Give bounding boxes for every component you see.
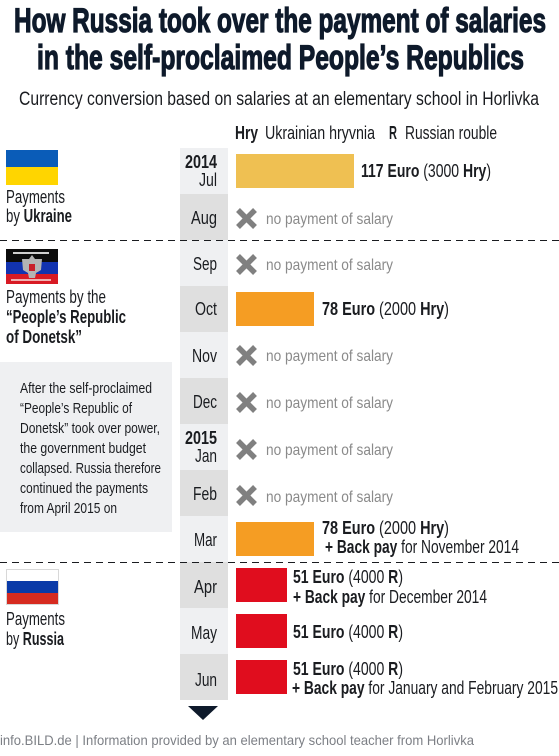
- month column: Aug: [191, 208, 217, 228]
- bar: Oct 2014: [236, 292, 449, 326]
- bar: Jul 2014: [236, 154, 491, 188]
- bar: May 2015: [236, 614, 403, 648]
- no payment: Aug: [238, 210, 393, 228]
- callout: After the self-proclaimed: [20, 380, 152, 397]
- no payment: Nov: [238, 347, 393, 365]
- no payment: Sep: no payment of salary: [266, 257, 393, 274]
- month column: Feb: [193, 484, 217, 504]
- currency legend: R: [389, 123, 397, 143]
- dividers: [0, 240, 559, 242]
- currency legend: Russian rouble: [405, 123, 497, 143]
- month column: Jul: [199, 170, 217, 190]
- label: Payments by the People's Republic of Donetsk: Payments by the: [6, 287, 106, 307]
- month column: Jun: [195, 670, 217, 690]
- month column: May: [191, 623, 217, 643]
- bar: Oct 2014: 78 Euro (2000 Hry): [322, 299, 449, 319]
- label: Payments by the People's Republic of Donetsk: [6, 287, 126, 347]
- label: Payments by Ukraine: by Ukraine: [6, 206, 72, 226]
- title: [14, 2, 546, 77]
- label: Payments by Ukraine: Payments: [6, 187, 65, 207]
- no payment: Jan: [238, 441, 393, 459]
- label: Payments by Russia: by Russia: [6, 629, 65, 649]
- bar: Jul 2014: 117 Euro (3000 Hry): [361, 161, 491, 181]
- no payment: Dec: no payment of salary: [266, 395, 393, 412]
- month column: 2014: [185, 152, 217, 172]
- month column: Mar: [194, 530, 217, 550]
- bar: May 2015: 51 Euro (4000 R): [293, 622, 403, 642]
- month column: Jan: [195, 446, 217, 466]
- bar: Mar 2015: [236, 518, 519, 557]
- callout: collapsed. Russia therefore: [20, 460, 161, 477]
- callout: from April 2015 on: [20, 500, 117, 517]
- no payment: Dec: [238, 394, 393, 412]
- label: Payments by the People's Republic of Donetsk: “People’s Republic: [6, 307, 126, 327]
- currency legend: Ukrainian hryvnia: [265, 123, 376, 143]
- month column: Nov: [192, 346, 217, 366]
- month column: [180, 148, 228, 700]
- flag: Donetsk: [6, 249, 58, 284]
- callout: continued the payments: [20, 480, 148, 497]
- bar: Apr 2015: 51 Euro (4000 R): [293, 567, 403, 587]
- no payment: Feb: [238, 487, 393, 506]
- flag: Russia: [6, 570, 58, 604]
- no payment: Sep: [238, 256, 393, 274]
- callout: “People’s Republic of: [20, 400, 133, 417]
- bar: Apr 2015: + Back pay for December 2014: [293, 587, 487, 607]
- no payment: Jan: no payment of salary: [266, 442, 393, 459]
- down arrow: [188, 706, 218, 720]
- month column: 2015: [185, 428, 217, 448]
- currency legend: [235, 123, 497, 143]
- footer source: info.BILD.de | Information provided by an elementary school teacher from Horlivka: [0, 732, 474, 748]
- month column: Sep: [193, 254, 217, 274]
- bar: Mar 2015: + Back pay for November 2014: [325, 537, 519, 557]
- label: Payments by the People's Republic of Donetsk: of Donetsk”: [6, 327, 82, 347]
- label: Payments by Russia: [6, 609, 65, 649]
- label: Payments by Russia: Payments: [6, 609, 65, 629]
- callout: [0, 362, 172, 532]
- flag: Ukraine: [6, 150, 58, 185]
- bar: Jun 2015: [236, 659, 558, 698]
- month column: Apr: [194, 577, 217, 597]
- bar: Jun 2015: 51 Euro (4000 R): [293, 659, 403, 679]
- no payment: Feb: no payment of salary: [266, 489, 393, 506]
- month column: Dec: [193, 392, 217, 412]
- callout: Donetsk” took over power,: [20, 420, 160, 437]
- callout: the government budget: [20, 440, 147, 457]
- no payment: Nov: no payment of salary: [266, 348, 393, 365]
- currency legend: Hry: [235, 123, 258, 143]
- label: Payments by Ukraine: [6, 187, 72, 226]
- no payment: Aug: no payment of salary: [266, 211, 393, 228]
- bar: Apr 2015: [236, 567, 487, 607]
- bar: Mar 2015: 78 Euro (2000 Hry): [322, 518, 449, 538]
- month column: Oct: [195, 299, 217, 319]
